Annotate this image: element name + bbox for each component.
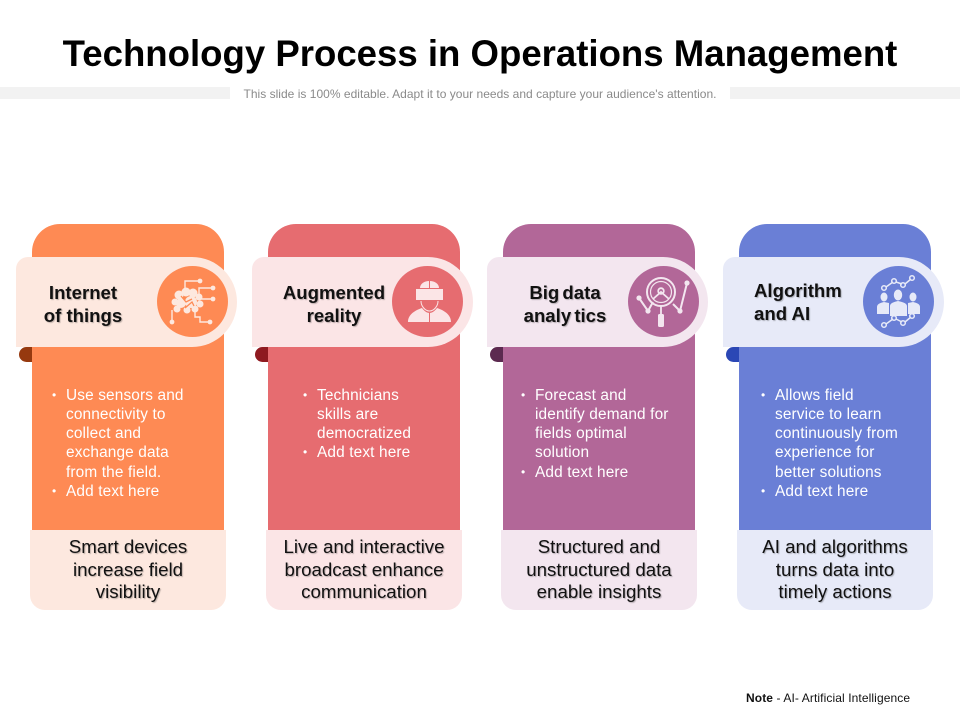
bullet list: democratized [317, 425, 411, 442]
bullet list: service to learn [775, 406, 882, 423]
panel: augmented reality [252, 224, 473, 610]
icon: circuit brain [157, 266, 228, 337]
header tab [487, 257, 708, 347]
panel body [32, 224, 224, 530]
heading: Augmented [283, 282, 385, 303]
subtitle: This slide is 100% editable. Adapt it to your needs and capture your audience's attention. [243, 87, 717, 101]
heading [524, 282, 607, 328]
panel: algorithm and AI [723, 224, 944, 610]
bullet list: from the field. [66, 464, 161, 481]
bullet list: Allows field [775, 387, 854, 404]
bullet list: Technicians [317, 387, 399, 404]
caption: communication [301, 581, 427, 602]
heading: analy tics [524, 305, 606, 326]
caption: unstructured data [526, 559, 672, 580]
bullet list: experience for [775, 444, 874, 461]
caption [501, 530, 697, 610]
caption [737, 530, 933, 610]
heading: Internet [49, 282, 117, 303]
icon: VR headset person [392, 266, 463, 337]
bullet list: Add text here [775, 483, 868, 500]
caption: Structured and [538, 536, 660, 557]
heading: of things [44, 305, 122, 326]
header tab [723, 257, 944, 347]
heading: and AI [754, 303, 810, 324]
subtitle bar left [0, 87, 230, 99]
heading [283, 282, 386, 328]
bullet list [52, 387, 184, 500]
bullet list: Add text here [66, 483, 159, 500]
icon: people with data lines [863, 266, 934, 337]
caption [30, 530, 226, 610]
footnote: Note - AI- Artificial Intelligence [746, 691, 910, 705]
heading [44, 282, 123, 328]
panel body [739, 224, 931, 530]
bullet list: Forecast and [535, 387, 627, 404]
fold accent [19, 347, 32, 362]
caption [266, 530, 462, 610]
caption: enable insights [537, 581, 661, 602]
subtitle bar right [730, 87, 960, 99]
bullet list: solution [535, 444, 589, 461]
panel body [268, 224, 460, 530]
heading: Big data [529, 282, 601, 303]
panel body [503, 224, 695, 530]
icon: magnifier with data [628, 266, 699, 337]
bullet list: exchange data [66, 444, 169, 461]
bullet list: skills are [317, 406, 378, 423]
caption: Live and interactive [283, 536, 444, 557]
bullet list: better solutions [775, 464, 882, 481]
bullet list [304, 387, 411, 461]
bullet list: connectivity to [66, 406, 166, 423]
caption: AI and algorithms [762, 536, 908, 557]
bullet list: fields optimal [535, 425, 627, 442]
header tab [16, 257, 237, 347]
bullet list [762, 387, 898, 500]
heading [754, 280, 842, 324]
bullet list: continuously from [775, 425, 898, 442]
caption: Smart devices [69, 536, 187, 557]
title: Technology Process in Operations Management [63, 33, 897, 74]
heading: reality [307, 305, 361, 326]
bullet list: Use sensors and [66, 387, 184, 404]
bullet list: Add text here [535, 464, 628, 481]
heading: Algorithm [754, 280, 842, 301]
bullet list: collect and [66, 425, 141, 442]
bullet list: identify demand for [535, 406, 669, 423]
fold accent [490, 347, 503, 362]
caption: visibility [96, 581, 160, 602]
bullet list [522, 387, 669, 481]
panel: big data analytics [487, 224, 708, 610]
header tab [252, 257, 473, 347]
caption: broadcast enhance [285, 559, 443, 580]
panel: internet of things [16, 224, 237, 610]
caption: timely actions [778, 581, 892, 602]
bullet list: Add text here [317, 444, 410, 461]
fold accent [726, 347, 739, 362]
caption: increase field [73, 559, 183, 580]
caption: turns data into [776, 559, 894, 580]
fold accent [255, 347, 268, 362]
